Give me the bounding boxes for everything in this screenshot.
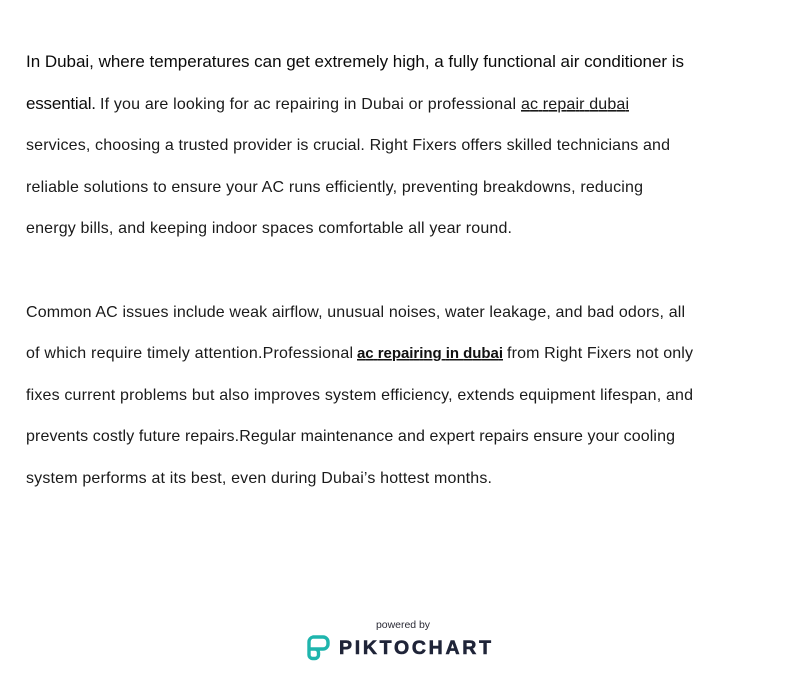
text block: second paragraph: ac repairing in dubai (357, 345, 503, 362)
text block: second paragraph: fixes current problems but also improves system efficiency, extends equipment lifespan, and (26, 387, 693, 404)
logo: powered by Piktochart (309, 619, 491, 659)
text block: second paragraph: system performs at its best, even during Dubai’s hottest months. (26, 470, 492, 487)
caption: powered by: powered by (376, 619, 431, 631)
text block: second paragraph: Common AC issues include weak airflow, unusual noises, water leakage, and bad odors, all (26, 304, 685, 321)
text block: second paragraph: prevents costly future repairs.Regular maintenance and expert repairs ensure your cooling (26, 428, 675, 445)
text block: first paragraph: services, choosing a trusted provider is crucial. Right Fixers offers skilled technicians and (26, 137, 670, 154)
wordmark: PIKTOCHART: PIKTOCHART (339, 637, 491, 659)
icon: Piktochart P mark (309, 637, 328, 658)
text block: second paragraph (26, 304, 693, 487)
text block: first paragraph: In Dubai, where temperatures can get extremely high, a fully functional air conditioner is (26, 52, 684, 71)
text block: first paragraph (26, 52, 684, 237)
text block: first paragraph: If you are looking for ac repairing in Dubai or professional (100, 96, 516, 113)
text block: second paragraph: of which require timely attention.Professional (26, 345, 353, 362)
text block: first paragraph: energy bills, and keeping indoor spaces comfortable all year round. (26, 220, 512, 237)
text block: first paragraph: reliable solutions to ensure your AC runs efficiently, preventing breakdowns, reducing (26, 179, 643, 196)
text block: first paragraph: essential. (26, 94, 96, 113)
text block: first paragraph: ac repair dubai (521, 96, 629, 113)
text block: second paragraph: from Right Fixers not only (507, 345, 693, 362)
